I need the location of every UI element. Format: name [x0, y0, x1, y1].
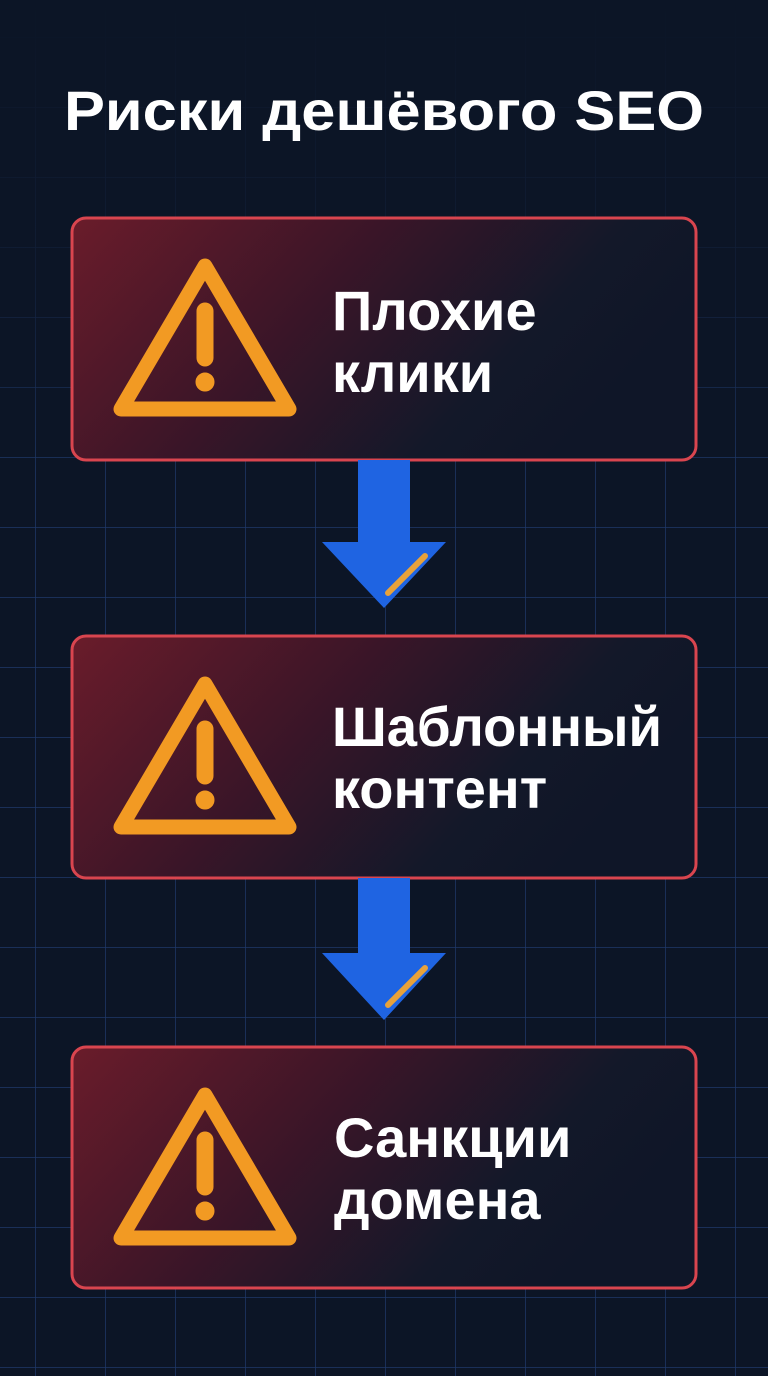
card: domain sanctions — [72, 1047, 696, 1288]
icon: warning triangle — [121, 266, 289, 409]
text: Шаблонный — [332, 695, 662, 758]
card: template content — [72, 636, 696, 878]
card: bad clicks — [72, 218, 696, 460]
arrow 1 — [322, 460, 446, 608]
arrow 2 — [322, 878, 446, 1020]
text: клики — [332, 341, 493, 404]
title: Риски дешёвого SEO — [64, 79, 704, 142]
text: домена — [334, 1168, 541, 1231]
icon: warning triangle — [121, 1095, 289, 1238]
icon: warning triangle — [121, 684, 289, 827]
text: Плохие — [332, 279, 537, 342]
text: Санкции — [334, 1106, 571, 1169]
text: контент — [332, 757, 547, 820]
